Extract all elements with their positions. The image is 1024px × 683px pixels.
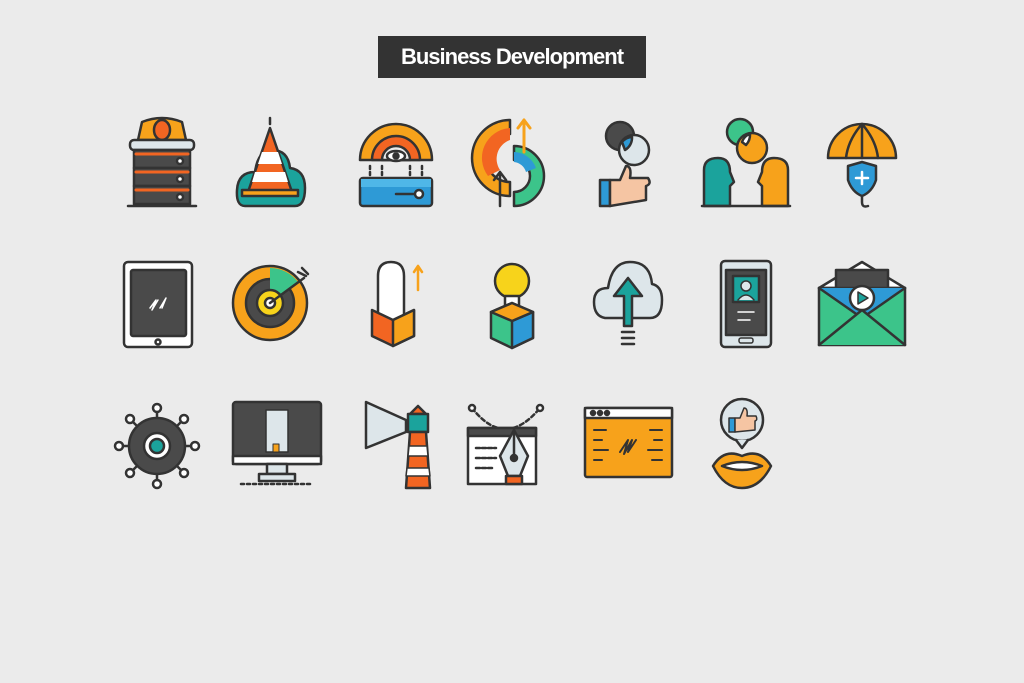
icon: lips with like bubble	[713, 399, 771, 488]
icon: S arrows split	[472, 120, 544, 206]
icon: smartphone	[721, 261, 771, 347]
icon: head in box	[372, 262, 422, 346]
title	[378, 36, 646, 78]
icon: video envelope	[819, 262, 905, 345]
icon: pen tool window	[468, 405, 543, 484]
icon: code window	[585, 408, 672, 477]
icon: eye rainbow and device	[360, 124, 432, 206]
title: Business Development	[401, 44, 623, 69]
icon: monitor with building	[233, 402, 321, 484]
icon: target with arrow	[233, 266, 308, 340]
icon: lighthouse	[366, 402, 430, 488]
icon: cone on cloud	[237, 118, 305, 206]
icon: cloud upload	[594, 262, 662, 344]
icon: tablet	[124, 262, 192, 347]
icon: network hub	[115, 404, 199, 488]
icon: two heads conversation	[702, 119, 790, 206]
icon: server with siren	[128, 118, 196, 206]
icon: thumbs up with bubbles	[600, 122, 650, 206]
icon: umbrella shield	[828, 124, 896, 206]
icon: bulb in box	[491, 264, 533, 348]
